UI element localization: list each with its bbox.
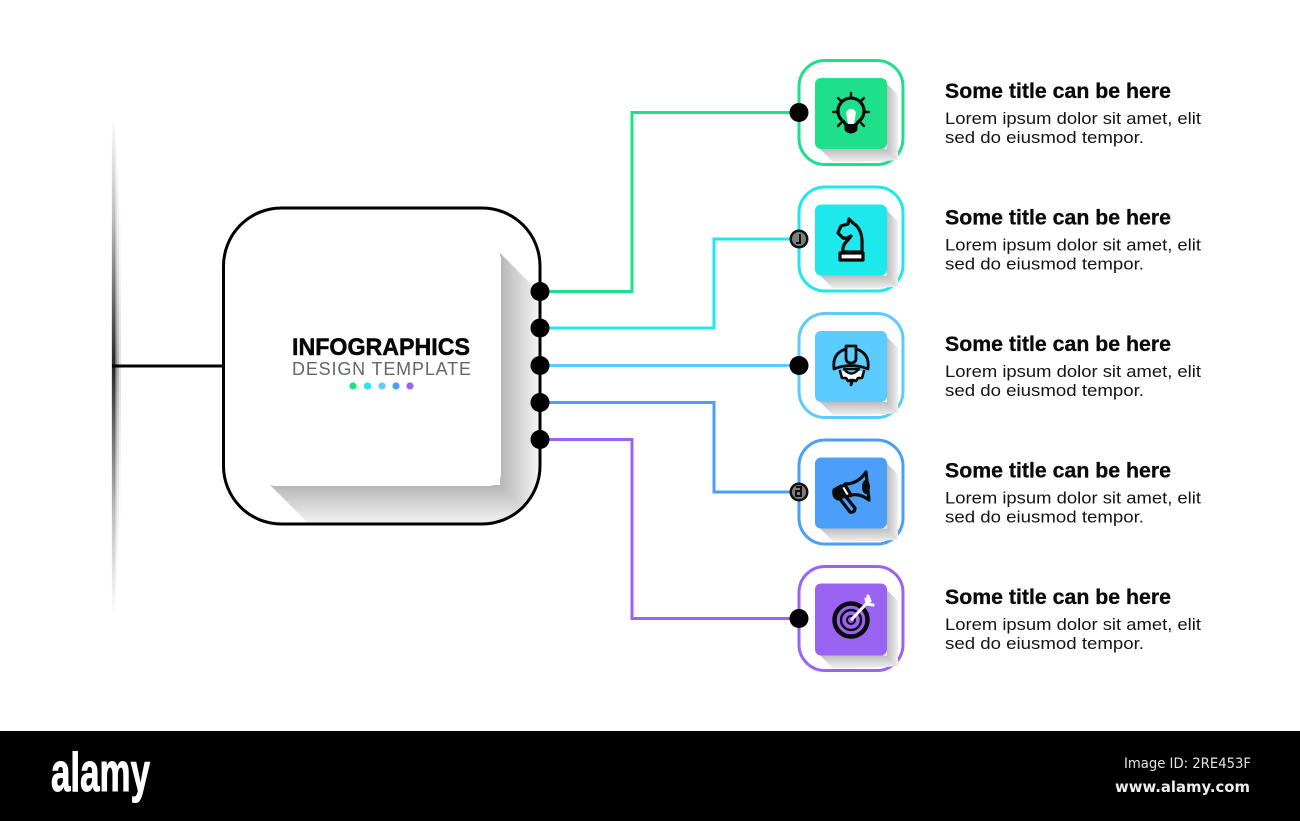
long shadow of inner card (270, 253, 541, 526)
panel: central square (224, 208, 541, 526)
text block 5: Lorem ipsum dolor sit amet, elit (945, 616, 1201, 634)
icon: megaphone (834, 472, 870, 512)
text block 2: sed do eiusmod tempor. (945, 256, 1144, 274)
alamy logo: alamy (51, 741, 150, 803)
text block 3: Lorem ipsum dolor sit amet, elit (945, 363, 1201, 381)
text block 1: Lorem ipsum dolor sit amet, elit (945, 110, 1201, 128)
card 3: light blue helmet (790, 314, 903, 418)
text block 4: Lorem ipsum dolor sit amet, elit (945, 490, 1201, 508)
card outline (799, 440, 903, 544)
icon tile (815, 584, 887, 656)
card shadow (820, 210, 898, 288)
card 2: cyan chess knight (790, 187, 903, 291)
outer rounded outline (224, 208, 540, 524)
text block 1: Some title can be here (945, 80, 1171, 103)
card outline (799, 314, 903, 418)
connector: purple (540, 440, 799, 618)
image id: Image ID: 2RE453F (1124, 756, 1251, 772)
icon tile (815, 458, 887, 528)
connector: light blue (540, 364, 799, 367)
text block 2: Some title can be here (945, 206, 1171, 230)
card shadow (820, 337, 898, 415)
icon: lightbulb (833, 93, 869, 133)
connector: blue (540, 402, 799, 492)
card outline (799, 60, 903, 164)
icon tile (815, 204, 887, 276)
card 4: blue megaphone (790, 440, 903, 544)
card shadow (820, 84, 898, 162)
text block 3: Some title can be here (945, 333, 1171, 356)
footer band (0, 731, 1300, 821)
text block 5: sed do eiusmod tempor. (945, 635, 1144, 653)
card 5: purple target (790, 566, 903, 670)
icon: chess knight (838, 219, 863, 260)
heading: infographics: INFOGRAPHICS (292, 334, 470, 361)
website: www.alamy.com (1115, 778, 1250, 796)
text block 4: Some title can be here (945, 460, 1171, 482)
inner white card (263, 248, 501, 486)
text block 4 (945, 460, 1201, 526)
text block 3 (945, 333, 1201, 400)
icon: helmet with gear (834, 346, 868, 385)
icon tile (815, 78, 887, 149)
connector from bar to central square (112, 364, 224, 368)
card outline (799, 187, 903, 291)
connector: cyan (540, 239, 799, 328)
subheading: design template: DESIGN TEMPLATE (292, 359, 471, 379)
source nodes on central square (530, 282, 550, 449)
link node (790, 482, 808, 502)
link node (790, 230, 808, 248)
card 1: green lightbulb (790, 60, 903, 164)
text block 5: Some title can be here (945, 586, 1171, 609)
card outline (799, 566, 903, 670)
text block 3: sed do eiusmod tempor. (945, 382, 1144, 400)
text block 1: sed do eiusmod tempor. (945, 129, 1144, 147)
card shadow (820, 590, 898, 668)
icon: target with arrow (834, 596, 873, 636)
icon tile (815, 331, 887, 402)
text block 2 (945, 206, 1201, 274)
connector: green (540, 112, 799, 292)
link node (790, 609, 808, 628)
link node (790, 103, 808, 122)
five colour dots (349, 382, 414, 390)
text block 4: sed do eiusmod tempor. (945, 508, 1144, 526)
text block 2: Lorem ipsum dolor sit amet, elit (945, 236, 1201, 254)
text block 1 (945, 80, 1201, 147)
link node (790, 356, 808, 375)
left vertical shadow bar (111, 115, 121, 615)
card shadow (820, 464, 898, 542)
text block 5 (945, 586, 1201, 653)
